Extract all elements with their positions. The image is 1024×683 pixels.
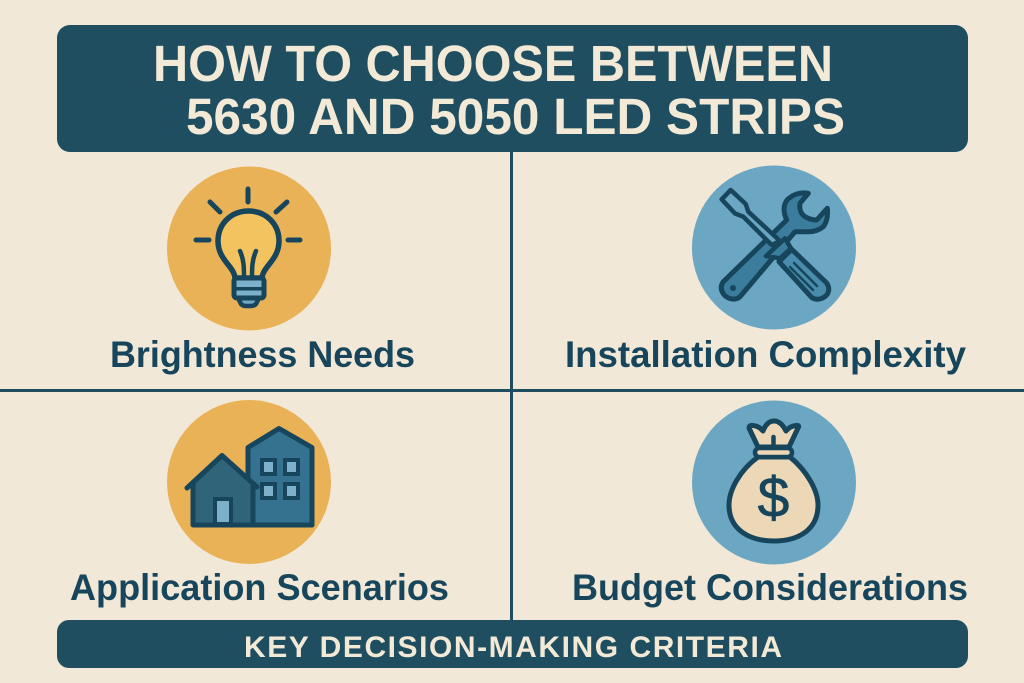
title text: 5630 AND 5050 LED STRIPS	[186, 88, 845, 145]
icon: light bulb	[167, 166, 331, 330]
footer banner	[57, 620, 968, 668]
panel: installation complexity	[565, 166, 966, 375]
title text: HOW TO CHOOSE BETWEEN	[153, 35, 833, 92]
panel: brightness needs	[110, 166, 415, 375]
footer text: KEY DECISION-MAKING CRITERIA	[244, 631, 782, 664]
label: budget considerations: Budget Considerations	[572, 567, 968, 608]
icon: wrench and screwdriver	[692, 166, 856, 330]
icon: house and building	[167, 400, 331, 564]
label: brightness needs: Brightness Needs	[110, 334, 415, 375]
label: application scenarios: Application Scenarios	[70, 567, 449, 608]
dollar sign: $	[758, 466, 789, 530]
panel: application scenarios	[70, 400, 449, 608]
title text	[153, 35, 845, 145]
panel: budget considerations	[572, 400, 968, 608]
title banner	[57, 25, 968, 152]
label: installation complexity: Installation Complexity	[565, 334, 966, 375]
icon: money bag	[692, 400, 856, 564]
